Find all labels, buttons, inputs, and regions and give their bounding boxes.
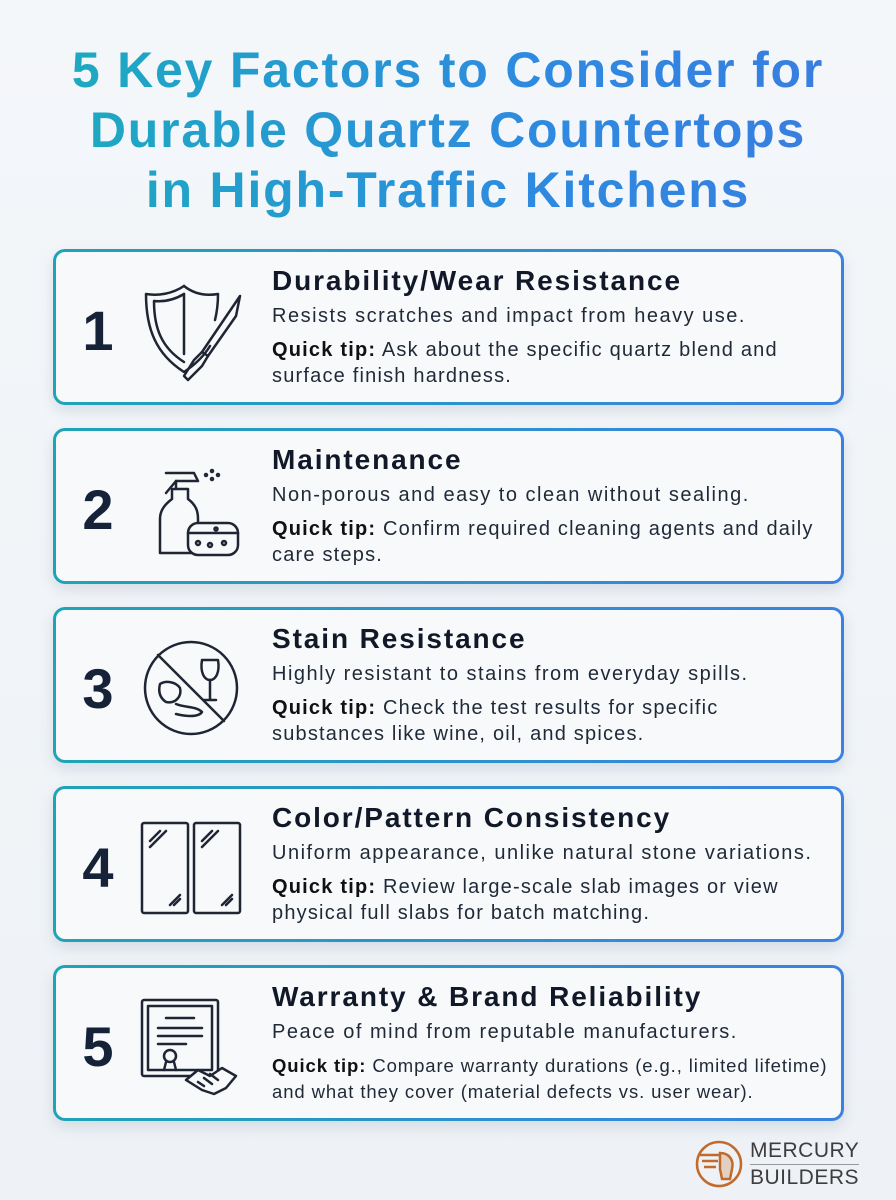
title: Durable Quartz Countertops [90, 102, 806, 158]
text [272, 444, 814, 566]
icon: two slabs [140, 822, 242, 914]
number 2: 2 [82, 478, 114, 541]
text: Maintenance [272, 444, 462, 475]
number 1: 1 [82, 299, 114, 362]
title: in High-Traffic Kitchens [146, 162, 750, 218]
text [272, 265, 778, 387]
logo: Mercury Builders [696, 1139, 859, 1189]
panel: warranty [53, 965, 844, 1121]
text: Resists scratches and impact from heavy use. [272, 305, 746, 327]
panel: maintenance [53, 428, 844, 584]
text: Quick tip: Compare warranty durations (e.g., limited lifetime) [272, 1055, 827, 1076]
icon: spray bottle and sponge [158, 468, 240, 556]
panel: stain resistance [53, 607, 844, 763]
text: physical full slabs for batch matching. [272, 902, 650, 924]
text: surface finish hardness. [272, 365, 512, 387]
text: Warranty & Brand Reliability [272, 981, 702, 1012]
number 3: 3 [82, 657, 114, 720]
text: Quick tip: Confirm required cleaning agents and daily [272, 518, 814, 540]
text: Stain Resistance [272, 623, 526, 654]
text: Non-porous and easy to clean without sealing. [272, 484, 750, 506]
number 4: 4 [82, 836, 114, 899]
text: Highly resistant to stains from everyday spills. [272, 663, 749, 685]
text: Quick tip: Review large-scale slab images or view [272, 876, 779, 898]
icon: certificate and handshake [140, 998, 238, 1096]
text: and what they cover (material defects vs. user wear). [272, 1081, 754, 1102]
icon: winged head [696, 1140, 742, 1188]
icon: no-stain symbol [144, 640, 238, 736]
text: Peace of mind from reputable manufacturers. [272, 1021, 738, 1043]
logo text: MERCURY BUILDERS [750, 1139, 859, 1189]
text: Quick tip: Ask about the specific quartz blend and [272, 339, 778, 361]
text: substances like wine, oil, and spices. [272, 723, 644, 745]
text [272, 623, 749, 745]
text [272, 802, 812, 924]
number 5: 5 [82, 1015, 114, 1078]
text [272, 981, 827, 1102]
panel: color consistency [53, 786, 844, 942]
text: care steps. [272, 544, 383, 566]
title [0, 40, 896, 220]
text: Uniform appearance, unlike natural stone variations. [272, 842, 812, 864]
text: Durability/Wear Resistance [272, 265, 682, 296]
title: 5 Key Factors to Consider for [72, 42, 824, 98]
icon: shield and knife [144, 284, 242, 382]
text: Color/Pattern Consistency [272, 802, 671, 833]
panel: durability [53, 249, 844, 405]
text: Quick tip: Check the test results for specific [272, 697, 718, 719]
